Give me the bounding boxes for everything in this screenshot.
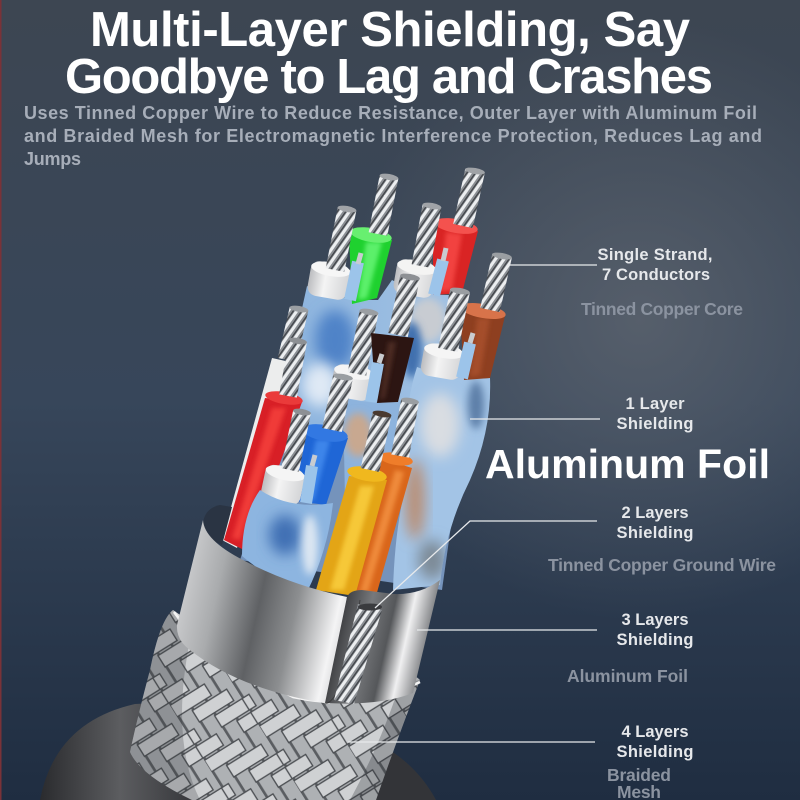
- wire: white long core left: [222, 304, 309, 548]
- label: 4 layers shielding: Shielding: [616, 743, 694, 761]
- foil shield: right large: [393, 367, 490, 590]
- wire: orange core: [348, 396, 419, 596]
- leader lines: [348, 265, 600, 742]
- description: [24, 103, 762, 169]
- label: single strand conductors: Single Strand,: [598, 246, 712, 264]
- wire: small blue drain lower left: [306, 455, 315, 503]
- label: 1 layer shielding: Shielding: [616, 415, 694, 433]
- label: 3 layers shielding: 3 Layers: [622, 611, 688, 629]
- wire: small blue drain by white right: [462, 333, 473, 378]
- wire: dark brown core: [371, 272, 420, 403]
- label: 4 layers shielding: 4 Layers: [622, 723, 688, 741]
- label: tinned copper core: Tinned Copper Core: [581, 299, 743, 319]
- bundle underlay: [240, 390, 470, 590]
- connector base: [40, 702, 436, 800]
- label: braided mesh: [607, 765, 671, 800]
- wire: white core top left: [306, 204, 357, 301]
- wire: green core: [349, 172, 399, 304]
- braided mesh: 4 layers shielding: [130, 610, 420, 800]
- wire: red core top: [433, 166, 485, 295]
- ground wire strand: [334, 604, 382, 704]
- title: [65, 3, 713, 104]
- label: 1 layer shielding: [616, 395, 694, 433]
- foil shield: upper pair: [297, 280, 449, 428]
- wire: yellow core: [316, 409, 392, 596]
- label: aluminum foil small: Aluminum Foil: [567, 666, 688, 686]
- foil shield: middle: [343, 398, 420, 500]
- wire: blue core: [288, 372, 353, 505]
- wire: white core lower left: [259, 407, 311, 507]
- wire: white core mid: [330, 307, 379, 402]
- label: 3 layers shielding: Shielding: [616, 631, 694, 649]
- label: 1 layer shielding: 1 Layer: [626, 395, 685, 413]
- foil shield: lower left: [242, 490, 333, 592]
- aluminium tube: 3 layers shielding: [177, 505, 440, 704]
- label: 2 layers shielding: [616, 504, 694, 542]
- wire: small blue drain by red: [434, 248, 446, 295]
- description: Jumps: [24, 149, 81, 169]
- label: single strand conductors: [598, 246, 712, 284]
- wire: brown core: [459, 251, 512, 380]
- wire: red core left: [224, 336, 307, 552]
- title: Multi-Layer Shielding, Say: [90, 3, 690, 57]
- title: Goodbye to Lag and Crashes: [65, 50, 713, 104]
- label: tinned copper ground wire: Tinned Copper Ground Wire: [548, 555, 776, 575]
- wire: small blue drain by green: [350, 253, 361, 300]
- description: Uses Tinned Copper Wire to Reduce Resistance, Outer Layer with Aluminum Foil: [24, 103, 757, 123]
- label: 2 layers shielding: 2 Layers: [622, 504, 688, 522]
- wire: small blue drain by brown: [371, 354, 382, 402]
- description: and Braided Mesh for Electromagnetic Interference Protection, Reduces Lag and: [24, 126, 762, 146]
- heading: aluminum foil: Aluminum Foil: [485, 441, 770, 487]
- label: 3 layers shielding: [616, 611, 694, 649]
- wire: white core right: [420, 286, 470, 381]
- label: single strand conductors: 7 Conductors: [602, 266, 710, 284]
- label: braided mesh: Braided: [607, 765, 671, 785]
- label: 4 layers shielding: [616, 723, 694, 761]
- wire: white core top right: [392, 201, 442, 299]
- label: 2 layers shielding: Shielding: [616, 524, 694, 542]
